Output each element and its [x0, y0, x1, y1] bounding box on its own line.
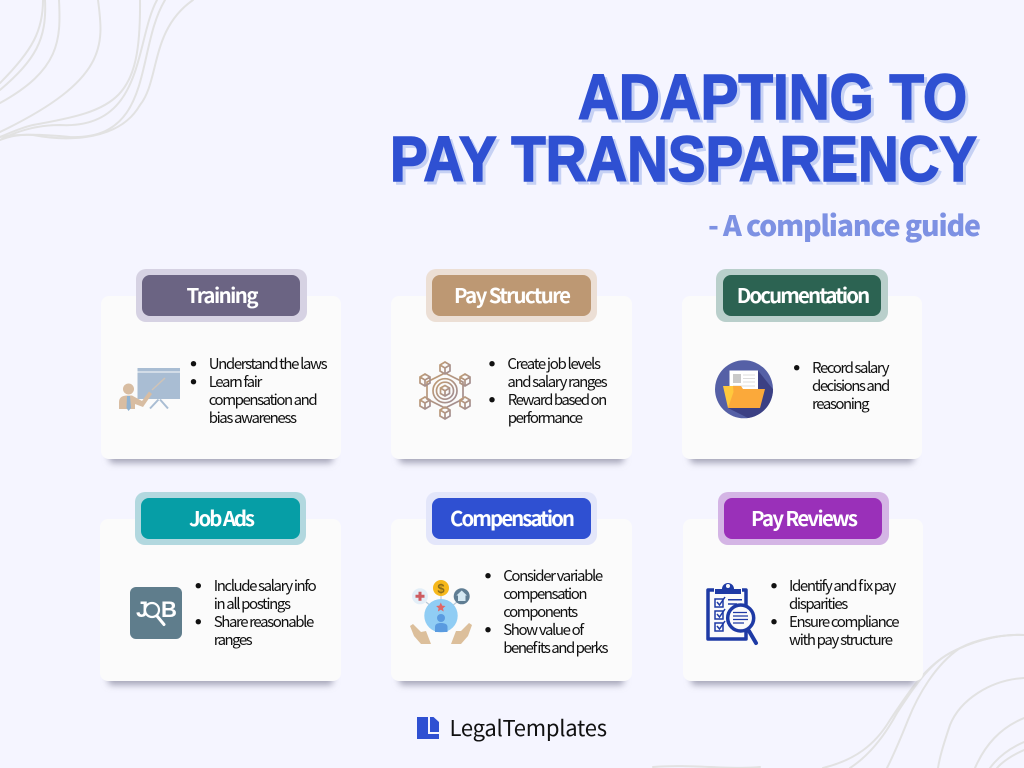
icon: job search: J [136, 597, 148, 622]
heading: documentation: Documentation [737, 279, 870, 309]
bullet list: documentation: decisions and [812, 375, 890, 396]
title [390, 61, 980, 198]
bullet list: compensation: Consider variable [503, 565, 603, 586]
bullet list: pay reviews: Ensure compliance [789, 611, 900, 632]
bullet list: job ads: Include salary info [214, 575, 317, 596]
heading: training [136, 269, 307, 322]
panel: pay reviews [683, 492, 923, 685]
bullet list: compensation: benefits and perks [503, 637, 608, 658]
heading: pay reviews [718, 492, 889, 545]
panel: compensation [391, 492, 632, 685]
heading: job ads: Job Ads [189, 502, 255, 532]
bullet list: training: Understand the laws [209, 353, 328, 374]
bullet list: pay reviews: with pay structure [789, 629, 893, 650]
bullet list: pay reviews: Identify and fix pay [789, 575, 896, 596]
icon: job search: B [161, 597, 177, 622]
icon: job search [130, 587, 182, 639]
panel: documentation [682, 269, 922, 463]
heading: documentation [716, 269, 888, 322]
bullet list: pay structure: Create job levels [507, 353, 601, 374]
bullet list: training: compensation and [209, 389, 318, 410]
bullet list: pay reviews [771, 575, 900, 650]
heading: job ads [135, 492, 306, 545]
bullet list: pay structure [489, 353, 608, 428]
bullet list: compensation [485, 565, 608, 658]
heading: training: Training [186, 279, 258, 309]
bullet list: pay structure: and salary ranges [507, 371, 608, 392]
panel: job ads [100, 492, 341, 685]
bullet list: job ads: Share reasonable [214, 611, 314, 632]
heading: pay reviews: Pay Reviews [751, 502, 858, 532]
bullet list: training [191, 353, 328, 428]
panel: training [101, 269, 341, 463]
icon: benefits in hands: $ [437, 581, 445, 596]
bullet list: job ads [196, 575, 317, 650]
icon: benefits in hands [410, 580, 472, 644]
bullet list: job ads: ranges [214, 629, 253, 650]
icon: network hexagon [420, 362, 470, 419]
heading: compensation: Compensation [450, 502, 575, 532]
bullet list: compensation: compensation [503, 583, 588, 604]
bullet list: documentation: Record salary [812, 357, 890, 378]
heading: compensation [426, 492, 597, 545]
bullet list: compensation: components [503, 601, 578, 622]
title: ADAPTING TO [578, 61, 967, 133]
bullet list: job ads: in all postings [214, 593, 291, 614]
bullet list: training: Learn fair [209, 371, 262, 392]
icon: checklist with magnifier [708, 583, 756, 643]
bullet list: pay structure: performance [508, 407, 583, 428]
bullet list: documentation [794, 357, 890, 414]
heading: pay structure: Pay Structure [454, 279, 571, 309]
bullet list: compensation: Show value of [503, 619, 585, 640]
icon: folder with document [715, 360, 773, 418]
title: ADAPTING TO [581, 64, 970, 136]
bullet list: pay reviews: disparities [789, 593, 848, 614]
subtitle: - A compliance guide [708, 204, 981, 245]
panel: pay structure [391, 269, 632, 463]
bullet list: pay structure: Reward based on [508, 389, 607, 410]
icon: presenter at board [119, 368, 180, 411]
heading: pay structure [426, 269, 597, 322]
bullet list: documentation: reasoning [812, 393, 870, 414]
bullet list: training: bias awareness [209, 407, 297, 428]
logo: LegalTemplates: LegalTemplates [450, 711, 607, 743]
